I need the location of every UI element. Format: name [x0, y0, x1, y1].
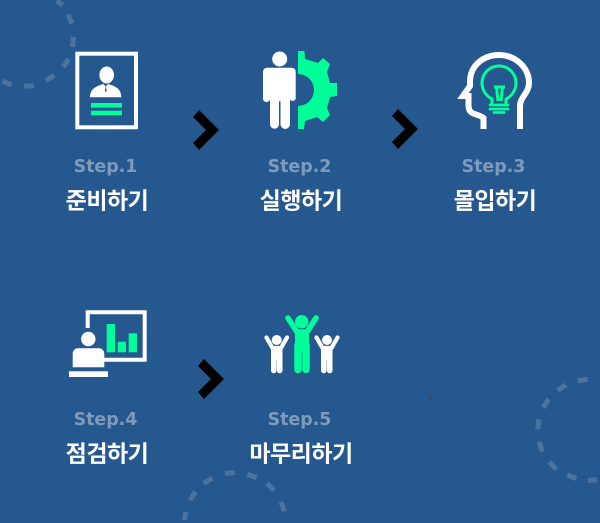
label: step 1: Step.1 [74, 157, 137, 177]
step 3: immersion [454, 55, 536, 214]
step 1: preparation [66, 54, 148, 214]
icon: person and gear [263, 51, 337, 129]
heading: step 4: 점검하기 [66, 440, 148, 466]
heading: step 2: 실행하기 [260, 188, 342, 214]
icon: presenter and chart board [69, 312, 145, 377]
arrow: step 2 to 3 [392, 109, 418, 149]
arrow: step 1 to 2 [193, 110, 219, 150]
step 5: completion [249, 315, 353, 466]
label: step 5: Step.5 [268, 410, 331, 430]
step 2: execution [260, 51, 342, 214]
icon: profile document [77, 54, 136, 127]
label: step 3: Step.3 [462, 157, 525, 177]
label: step 4: Step.4 [74, 410, 137, 430]
arrow: step 4 to 5 [198, 359, 224, 399]
icon: three people cheering [266, 315, 338, 370]
label: step 2: Step.2 [268, 157, 331, 177]
heading: step 1: 준비하기 [66, 188, 148, 214]
step 4: review [66, 312, 148, 466]
icon: head with light bulb [463, 55, 529, 129]
heading: step 5: 마무리하기 [249, 440, 353, 466]
heading: step 3: 몰입하기 [454, 188, 536, 214]
